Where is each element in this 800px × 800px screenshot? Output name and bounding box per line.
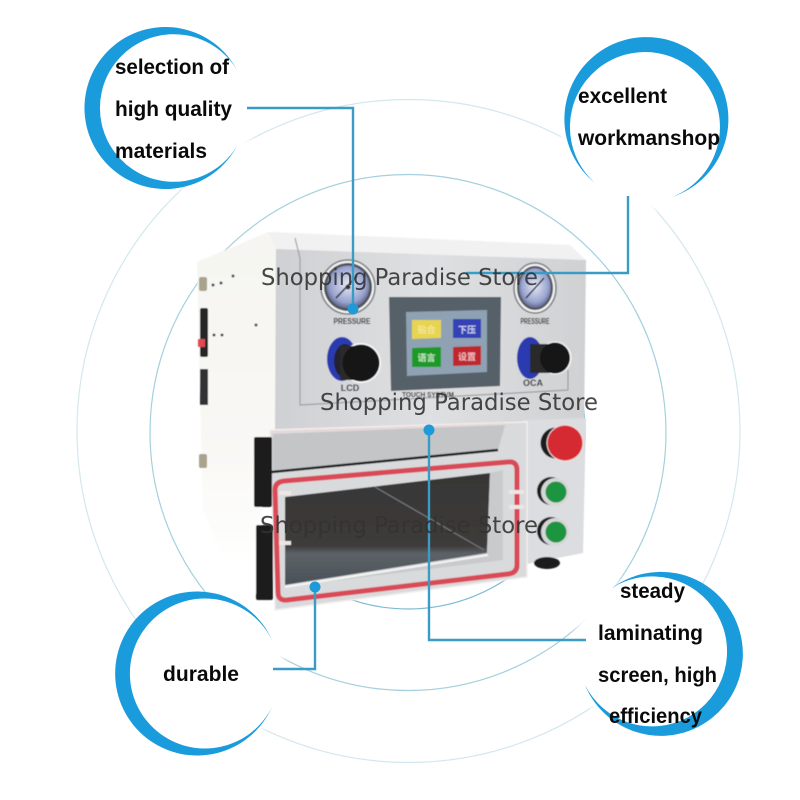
callout text: screen, high (598, 664, 717, 687)
callout text: durable (163, 663, 239, 686)
power switch (198, 308, 208, 357)
label: LCD: LCD (341, 383, 360, 393)
window frame (285, 470, 503, 587)
power socket (200, 369, 208, 405)
leader line: durable to door frame (273, 582, 320, 669)
screen button: yellow: 贴合 (417, 324, 436, 335)
screen button: green: 语言 (417, 352, 436, 363)
LCD knob (327, 337, 381, 383)
callout: selection of high quality materials (84, 27, 256, 189)
leader line: materials to gauge (247, 108, 358, 314)
label: left pressure: PRESSURE (334, 316, 371, 326)
viewing window (285, 473, 490, 585)
door upper section (273, 425, 505, 472)
window reflection (375, 487, 484, 550)
window frame bright edge (285, 555, 488, 587)
callout text (115, 56, 232, 163)
upper latch (254, 437, 272, 507)
background concentric rings (77, 100, 740, 762)
green button lower (537, 517, 569, 546)
callout: steady laminating screen, high efficiency (572, 572, 743, 736)
watermark lower: Shopping Paradise Store (260, 513, 538, 539)
crescent ring (585, 572, 743, 736)
callout text: selection of (115, 56, 230, 79)
crescent ring (115, 592, 272, 756)
touch screen (389, 297, 501, 391)
callout text (598, 580, 717, 728)
side panel fittings (199, 274, 258, 468)
crescent ring (84, 27, 237, 189)
callout: durable (115, 592, 285, 756)
label: right pressure: PRESSURE (520, 317, 550, 326)
emergency stop button (540, 424, 584, 462)
vacuum chamber door (270, 422, 527, 610)
callout text (577, 85, 720, 150)
door top highlight (272, 424, 505, 432)
watermark top: Shopping Paradise Store (261, 265, 538, 291)
touch system label: TOUCH SYSTVM (402, 392, 454, 399)
screen button: blue: 下压 (458, 325, 476, 335)
red gasket (275, 462, 517, 600)
button column panel (522, 418, 586, 565)
leader line: workmanship to panel (466, 196, 628, 273)
inset panel outline (295, 238, 568, 405)
callout text: efficiency (609, 705, 702, 728)
callout text: high quality (115, 98, 232, 121)
lower latch (256, 525, 273, 600)
callout text: laminating (598, 622, 703, 645)
left pressure gauge (321, 260, 375, 314)
machine side panel (197, 232, 278, 600)
callout text: materials (115, 140, 207, 163)
leader line: laminating to door (424, 424, 586, 640)
label: OCA: OCA (523, 378, 544, 388)
machine foot (534, 557, 560, 569)
machine front panel (275, 249, 586, 432)
door slit (272, 450, 498, 472)
OCA knob (517, 337, 572, 379)
door clips (279, 490, 524, 545)
callout text: excellent (578, 85, 667, 108)
right pressure gauge (514, 263, 556, 313)
screen button: red: 设置 (458, 351, 476, 362)
crescent ring (564, 37, 728, 197)
machine top edge (268, 232, 586, 260)
green button upper (537, 477, 569, 506)
callout: excellent workmanshop (561, 37, 729, 210)
watermark middle: Shopping Paradise Store (320, 390, 598, 416)
machine (197, 232, 586, 610)
callout text: steady (620, 580, 685, 603)
callout text: workmanshop (577, 127, 720, 150)
